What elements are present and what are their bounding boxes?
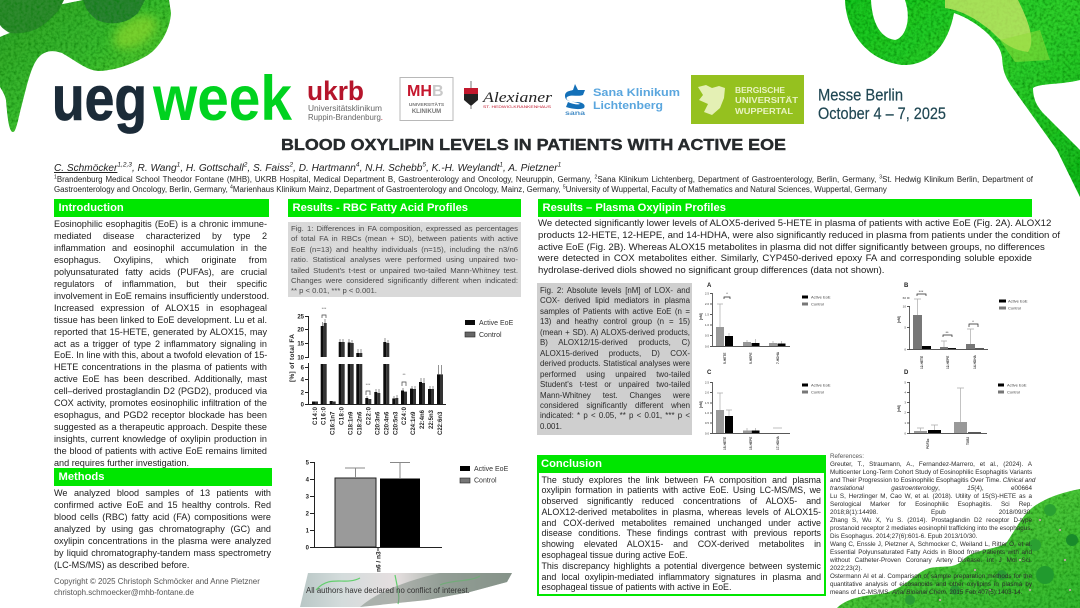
venue and date: October 4 – 7, 2025 — [818, 104, 946, 123]
text: Introduction: involvement in EoE remains insufficiently understood. — [54, 291, 269, 301]
chart D: COX products: 5 — [904, 380, 906, 384]
venue and date — [818, 86, 946, 123]
chart A: ALOX5 products: 5-HEPE — [749, 352, 753, 364]
logo: UKRB: ukrb — [307, 76, 364, 106]
chart: n6/n3 ratio: n6 / n3 — [376, 551, 382, 572]
chart D: COX products: PGF2α — [926, 439, 930, 449]
logo: MHB Universitätsklinikum: KLINIKUM — [412, 109, 441, 115]
chart C: ALOX15 products: 17-HDHA — [776, 435, 780, 450]
heading: Introduction: Introduction — [58, 202, 124, 214]
chart A: ALOX5 products: A — [707, 283, 712, 289]
text: Conclusion: esophageal tissue of patients with active in EoE. — [542, 582, 731, 592]
legend B: Control — [1008, 306, 1021, 310]
chart: n6/n3 ratio — [306, 460, 442, 572]
figure 2 caption: B) ALOX12/15-derived products, C) — [540, 338, 690, 347]
text: Conclusion: and COX-derived metabolites remained unchanged under active — [542, 518, 821, 528]
legend B — [999, 298, 1028, 310]
text: Conclusion: oxylipin formation in patients with active EoE. Using LC-MS/MS, we — [542, 485, 821, 495]
logo: MHB Universitätsklinikum: UNIVERSITÄTS — [409, 101, 445, 108]
venue and date: Messe Berlin — [818, 86, 903, 104]
figure 1 caption: Changes were considered significantly different when indicated: — [291, 276, 518, 285]
text: Results Plasma: were detected in COX metabolites either. Similarly, CYP450-derived epoxy FA and corresponding soluble epoxide — [538, 253, 1032, 264]
references: Serological Marker for Eosinophilic Esophagitis. Sci Rep. — [830, 501, 1032, 508]
figure 2 caption: COX- derived lipid mediators in plasma — [540, 296, 690, 305]
figure 1 caption: ratio. Statistical analyses were performed using unpaired two- — [291, 255, 518, 264]
text: Introduction: tissue has been linked to EoE development. Lu et al. — [54, 315, 267, 325]
heading: Results RBC: Results - RBC Fatty Acid Profiles — [292, 202, 468, 214]
figure 2 caption — [540, 286, 690, 431]
text: Conclusion: observed significantly reduced concentrations of ALOX5- and — [542, 496, 821, 506]
references: prostanoid receptor 2 mediates eosinophil trafficking into the esophagus. — [830, 525, 1032, 532]
references: 2018;8(1):14498. Epub 2018/09/30. — [830, 509, 1032, 516]
logo: Bergische Universität Wuppertal: UNIVERSITÄT — [735, 96, 798, 105]
text: Results Plasma: hydrolase-derived diols showed no significant group differences (data not shown). — [538, 265, 884, 276]
decoration: bottom-centre photo strip — [300, 573, 512, 607]
text: Methods — [54, 488, 271, 570]
heading: Results RBC — [288, 199, 521, 217]
chart: fatty acid composition: 22:4n6 — [420, 409, 426, 429]
chart A: ALOX5 products: [nM] — [699, 313, 703, 320]
figure 2 caption: 0.001. — [540, 422, 562, 431]
references: Lu S, Herzlinger M, Cao W, et al. (2018). Utility of 15(S)-HETE as a — [830, 493, 1032, 500]
legend A: Control — [811, 302, 824, 306]
figure 2 caption: Mann-Whitney test. Changes were — [540, 391, 690, 400]
text: Introduction: active EoE has been described. Additionally, mast — [54, 374, 267, 384]
text: Conclusion — [542, 474, 821, 592]
legend: fatty acid chart — [465, 320, 514, 339]
logo: UKRB: Universitätsklinikum — [308, 104, 382, 113]
references: 2022;23(2). — [830, 565, 862, 572]
chart: fatty acid composition: C22:6n3 — [438, 411, 444, 435]
text: Introduction: reported that 15-HETE, generated by ALOX15, may — [54, 327, 267, 337]
chart B: ALOX12/15 products: ** — [945, 330, 949, 335]
legend: fatty acid chart: Active EoE — [479, 320, 514, 327]
references: without Catheter-Proven Coronary Artery Disease. Int J Mol Sci. — [830, 557, 1032, 564]
chart C: ALOX15 products: 0.5 — [705, 421, 709, 425]
text: Methods: We analyzed blood samples of 13 patients with — [54, 488, 271, 498]
chart B: ALOX12/15 products: 10 — [903, 304, 906, 308]
chart: fatty acid composition: [%] of total FA — [289, 334, 296, 382]
figure 2 caption: performed using unpaired two-tailed — [540, 370, 690, 379]
logo: Sana Klinikum Lichtenberg — [565, 84, 680, 117]
logo: UKRB — [307, 76, 383, 122]
chart B: ALOX12/15 products: 0 — [904, 348, 906, 352]
logo: Sana Klinikum Lichtenberg: Lichtenberg — [593, 100, 663, 112]
references: translational gastroenterology, 15(4), e00664 — [830, 485, 1032, 492]
affiliations: 1Brandenburg Medical School Theodor Fontane (MHB), UKRB Hospital, Medical Department B, Gastroenterology and Oncology, Neuruppin, Germany, 2Sana Klinikum Lichtenberg, Department of Gastroenterology, Berlin, Germany, 3St. Hedwig Klinikum Berlin, Department of — [54, 174, 1033, 184]
figure 1 caption: ** p < 0.01, *** p < 0.001. — [291, 286, 377, 295]
chart: fatty acid composition: C20:3n6 — [375, 411, 381, 435]
references: Ostermann AI et al. Comparison of sample preparation methods for the — [830, 573, 1032, 580]
chart: n6/n3 ratio: 4 — [306, 478, 310, 484]
text: Results Plasma: active EoE (Fig. 2B). Whereas ALOX15 metabolites in plasma did not differ significantly between groups, no differences — [538, 242, 1045, 253]
text: Methods: analyzed by using gas chromatography (GC) and — [54, 524, 271, 534]
affiliations — [54, 174, 1033, 194]
text: Conclusion: and local oxylipin-mediated inflammatory signatures in plasma and — [542, 572, 821, 582]
chart A: ALOX5 products — [699, 283, 790, 364]
references: Zhang S, Wu X, Yu S. (2014). Prostaglandin D2 receptor D-type — [830, 517, 1032, 524]
chart: fatty acid composition: C16:0 — [322, 406, 328, 425]
chart B: ALOX12/15 products: * — [972, 319, 974, 324]
legend C: Active EoE — [811, 382, 831, 388]
figure 1 caption: EoE (n=13) and healthy individuals (n=15), including the n3/n6 — [291, 245, 518, 254]
heading: Methods — [54, 468, 272, 486]
text: Conclusion: ALOX12-derived metabolites in plasma, whereas levels of ALOX15- — [542, 507, 821, 517]
references — [830, 453, 1036, 596]
references: Wang C, Enssle J, Pietzner A, Schmocker C, Weiland L, Ritter O, et al. — [830, 541, 1032, 548]
chart: fatty acid composition: C16:1n7 — [331, 411, 337, 435]
references: Dis Esophagus. 2014;27(6):601-6. Epub 2013/10/30. — [830, 533, 977, 540]
legend D — [998, 382, 1027, 394]
references: Essential Polyunsaturated Fatty Acids in Blood from Patients with and — [830, 549, 1032, 556]
chart A: ALOX5 products: 0.0 — [705, 344, 709, 348]
chart D: COX products: 3 — [904, 400, 906, 404]
text: Introduction: the blood of patients with active EoE remains limited — [54, 446, 267, 456]
text: Introduction: insights, current knowledge of oxylipin production in — [54, 434, 267, 444]
text: Introduction: inflammation and eosinophil accumulation in the — [54, 243, 267, 253]
chart: fatty acid composition: C20:4n6 — [384, 411, 390, 435]
chart B: ALOX12/15 products: 12-HEPE — [946, 356, 950, 369]
chart: fatty acid composition: C18:0 — [340, 406, 346, 425]
chart: fatty acid composition: 0 — [301, 402, 305, 408]
text: Methods: blood cells (RBC) fatty acid (FA) compositions were — [54, 512, 271, 522]
chart: fatty acid composition — [289, 306, 446, 435]
decoration: bottom-right green blob — [837, 489, 1080, 608]
figure 2 caption: samples of Patients with active EoE (n = — [540, 307, 690, 316]
legend: n6/n3 chart — [460, 466, 509, 484]
chart: fatty acid composition: *** — [366, 382, 371, 387]
text: Conclusion: This discrepancy highlights a potential divergence between systemic — [542, 561, 821, 571]
copyright and contact — [54, 577, 260, 597]
figure 1 caption: Fig. 1: Differences in FA composition, expressed as percentages — [291, 224, 518, 233]
conclusion box — [538, 456, 825, 595]
text: Introduction: polyunsaturated fatty acids (PUFAs), are crucial — [54, 267, 267, 277]
chart D: COX products: D — [904, 370, 909, 376]
text: Introduction: EoE. In line with this, about a twofold elevation of 15- — [54, 350, 267, 360]
logo: Sana Klinikum Lichtenberg: sana — [565, 111, 586, 117]
chart B: ALOX12/15 products: B — [904, 283, 909, 289]
chart D: COX products: TXB2 — [966, 437, 970, 445]
heading: Methods: Methods — [58, 471, 104, 483]
references: Greuter, T., Straumann, A., Fernandez-Marrero, et al., (2024). A — [830, 461, 1032, 468]
logo: UEG Week: week — [152, 64, 293, 134]
legend C: Control — [811, 390, 824, 394]
chart C: ALOX15 products: C — [707, 370, 712, 376]
references: means of LC-MS/MS. Anal Bioanal Chem. 2015 Feb;407(5):1403-14. — [830, 589, 1023, 596]
legend D: Active EoE — [1007, 382, 1027, 388]
text: Methods: (LC-MS/MS) as described before. — [54, 560, 189, 570]
text: Introduction: COX activity, promotes eosinophilic infiltration of the — [54, 398, 267, 408]
chart: fatty acid composition: C24:0 — [402, 406, 408, 425]
chart C: ALOX15 products: [nM] — [699, 401, 703, 408]
chart A: ALOX5 products: 2.0 — [705, 302, 709, 306]
chart: n6/n3 ratio: 2 — [306, 512, 310, 518]
text: Introduction — [54, 219, 269, 468]
heading: Conclusion — [537, 455, 826, 473]
chart: fatty acid composition: *** — [322, 306, 327, 311]
chart B: ALOX12/15 products — [897, 283, 988, 369]
text: Results Plasma: We detected significantly lower levels of ALOX5-derived 5-HETE in plasma of patients with active EoE (Fig. 2A). ALOX12 — [538, 218, 1051, 229]
text: Results Plasma: products 12-HETE, 12-HEPE, and 14-HDHA, were also significantly reduced in plasma from patients under the condition of — [538, 230, 1060, 241]
logo: Alexianer: Alexianer — [482, 90, 552, 106]
text: Conclusion: showing elevated ALOX15- and COX-derived metabolites in — [542, 539, 821, 549]
text: Introduction: act as a trigger of type 2 inflammatory signaling in — [54, 339, 267, 349]
figure 2 caption: indicated: * p < 0.05, ** p < 0.01, *** p < — [540, 411, 690, 420]
logo: UKRB: Ruppin-Brandenburg. — [308, 113, 383, 122]
grey box: figure 1 caption — [288, 222, 521, 297]
figure 2 caption: (mean + SD). A) ALOX5-derived products, — [540, 328, 690, 337]
logo: Bergische Universität Wuppertal: WUPPERTAL — [735, 107, 793, 116]
chart D: COX products: [nM] — [897, 405, 901, 412]
logo: Bergische Universität Wuppertal — [691, 75, 804, 124]
copyright and contact: Copyright © 2025 Christoph Schmöcker and Anne Pietzner — [54, 577, 260, 586]
logo: MHB Universitätsklinikum: B — [432, 83, 444, 100]
text: Methods: confirmed active EoE and 15 healthy controls. Red — [54, 500, 271, 510]
logo: MHB Universitätsklinikum: MH — [407, 83, 432, 100]
logo: MHB Universitätsklinikum — [400, 78, 453, 120]
chart D: COX products — [897, 370, 987, 449]
figure 2 caption: Fig. 2: Absolute levels [nM] of LOX- and — [540, 286, 690, 295]
chart A: ALOX5 products: 1.0 — [705, 323, 709, 327]
text: Methods: by liquid chromatography-tandem mass spectrometry — [54, 548, 271, 558]
chart B: ALOX12/15 products: 12-HETE — [920, 356, 924, 369]
figure 2 caption: derived products. Statistical analyses were — [540, 359, 690, 368]
chart C: ALOX15 products: 15-HEPE — [749, 437, 753, 450]
legend A: Active EoE — [811, 294, 831, 300]
chart A: ALOX5 products: 7-HDHA — [776, 351, 780, 364]
text: Results Plasma — [538, 218, 1060, 276]
legend B: Active EoE — [1008, 298, 1028, 304]
text: Methods: oxylipin concentrations in the plasma were analyzed — [54, 536, 271, 546]
chart A: ALOX5 products: 2.5 — [705, 292, 709, 296]
text: Introduction: esophagus, and PGD2 receptor blockade has been — [54, 410, 267, 420]
legend C — [802, 382, 831, 394]
legend: n6/n3 chart: Control — [474, 478, 497, 484]
chart C: ALOX15 products: 2.5 — [705, 380, 709, 384]
chart B: ALOX12/15 products: 5 — [904, 326, 906, 330]
chart A: ALOX5 products: 0.5 — [705, 334, 709, 338]
legend: n6/n3 chart: Active EoE — [474, 466, 509, 473]
text: Introduction: and requires further investigation. — [54, 458, 189, 468]
references: References: — [830, 453, 864, 460]
chart A: ALOX5 products: 5-HETE — [723, 353, 727, 364]
chart C: ALOX15 products — [699, 370, 790, 450]
chart: fatty acid composition: 6 — [301, 366, 305, 372]
chart: fatty acid composition: 25 — [297, 314, 305, 320]
legend D: Control — [1007, 390, 1020, 394]
chart D: COX products: 4 — [904, 390, 906, 394]
chart: fatty acid composition: C24:1n9 — [411, 411, 417, 435]
text: Conclusion: disease conditions. These findings contrast with previous reports — [542, 528, 821, 538]
title: BLOOD OXYLIPIN LEVELS IN PATIENTS WITH ACTIVE EOE — [281, 137, 786, 154]
heading: Conclusion: Conclusion — [541, 458, 602, 470]
logo: UEG Week: ueg — [52, 64, 147, 134]
figure 1 caption: of total FA in RBCs (mean + SD), between patients with active — [291, 234, 518, 243]
conflict of interest note: All authors have declared no conflict of interest. — [306, 586, 470, 595]
text: Introduction: esophagus. Oxylipins, which originate from — [54, 255, 267, 265]
decoration: top-right green tentacle — [845, 0, 1080, 197]
legend: fatty acid chart: Control — [479, 332, 502, 339]
chart D: COX products: 0 — [904, 432, 906, 436]
chart: fatty acid composition: C18:1n9 — [349, 411, 355, 435]
chart C: ALOX15 products: 15-HETE — [723, 437, 727, 450]
heading: Results Plasma: Results – Plasma Oxylipin Profiles — [542, 202, 726, 214]
chart: fatty acid composition: 2 — [301, 390, 305, 396]
copyright and contact: christoph.schmoecker@mhb-fontane.de — [54, 588, 194, 597]
text: Conclusion: The study explores the link between FA composition and plasma — [542, 474, 821, 484]
heading: Introduction — [54, 199, 269, 217]
chart: n6/n3 ratio: 3 — [306, 494, 310, 500]
chart: fatty acid composition: C22:0 — [366, 406, 372, 425]
chart: fatty acid composition: 15 — [297, 342, 305, 348]
authors: C. Schmöcker1,2,3, R. Wang1, H. Gottschall2, S. Faiss2, D. Hartmann4, N.H. Schebb5, K.-H. Weylandt1, A. Pietzner1 — [54, 162, 561, 174]
chart: fatty acid composition: 4 — [301, 378, 305, 384]
grey box: figure 2 caption — [537, 283, 692, 435]
logo: Sana Klinikum Lichtenberg: Sana Klinikum — [593, 87, 680, 99]
text: Introduction: Eosinophilic esophagitis (EoE) is a chronic immune- — [54, 219, 267, 229]
chart B: ALOX12/15 products: 14-HDHA — [973, 354, 977, 369]
chart: fatty acid composition: C18:2n6 — [357, 411, 363, 435]
chart A: ALOX5 products: 1.5 — [705, 312, 709, 316]
legend A — [802, 294, 831, 306]
chart: fatty acid composition: 10 — [297, 356, 305, 362]
references: and Their Progression to Eosinophilic Esophagitis Over Time. Clinical and — [830, 477, 1035, 484]
figure 2 caption: Student's t-test or unpaired two-tailed — [540, 380, 690, 389]
figure 1 caption: tailed Student's t-test or unpaired two-tailed Mann-Whitney test. — [291, 266, 518, 275]
chart C: ALOX15 products: 1.5 — [705, 401, 709, 405]
text: Introduction: cell–derived prostaglandin D2 (PGD2), produced via — [54, 386, 267, 396]
chart: fatty acid composition: 20 — [297, 328, 305, 334]
references: Multicenter Long-Term Cohort Study of Eosinophilic Esophagitis Variants — [830, 469, 1032, 476]
chart: fatty acid composition: ** — [402, 372, 406, 377]
chart B: ALOX12/15 products: *** — [919, 289, 924, 294]
references: quantitative analysis of eicosanoids and other oxylipins in plasma by — [830, 581, 1032, 588]
chart: fatty acid composition: C14:0 — [313, 406, 319, 425]
text: Introduction: regulators of inflammation, but their specific — [54, 279, 267, 289]
figure 2 caption: ALOX15-derived products, D) COX- — [540, 349, 690, 358]
figure 1 caption — [291, 224, 518, 295]
text: Introduction: HETE concentrations in the plasma of patients with — [54, 362, 267, 372]
chart: n6/n3 ratio: 5 — [306, 460, 310, 466]
chart B: ALOX12/15 products: 60 — [903, 296, 906, 300]
text: Introduction: mediated disease characterized by type 2 — [54, 231, 267, 241]
text: Conclusion: esophageal tissue during active EoE. — [542, 550, 688, 560]
chart B: ALOX12/15 products: [nM] — [897, 316, 901, 323]
logo: Alexianer: ST. HEDWIG-KRANKENHAUS — [483, 104, 551, 109]
logo: Alexianer — [464, 81, 552, 109]
chart D: COX products: 2 — [904, 410, 906, 414]
logo: UEG Week — [52, 64, 293, 134]
chart C: ALOX15 products: 0.0 — [705, 432, 709, 436]
heading: Results Plasma — [538, 199, 1032, 217]
figure 2 caption: 13) and heathy control group (n = 15) — [540, 317, 690, 326]
figure 2 caption: considered significantly different when — [540, 401, 690, 410]
chart D: COX products: 1 — [904, 421, 906, 425]
decoration: top-left green blob — [0, 0, 171, 132]
chart: n6/n3 ratio: 1 — [306, 528, 310, 534]
chart A: ALOX5 products: * — [726, 291, 728, 296]
text: Introduction: suggested as a therapeutic approach. Despite these — [54, 422, 267, 432]
affiliations: Gastroenterology and Oncology, Berlin, Germany, 4Marienhaus Klinikum Mainz, Department of Gastroenterology and Oncology, Mainz, Germany, 5University of Wuppertal, Faculty of Mathematics and Natural Sciences, Wuppertal, Germany — [54, 184, 887, 194]
chart C: ALOX15 products: 1.0 — [705, 411, 709, 415]
chart: n6/n3 ratio: 0 — [306, 546, 310, 552]
text: Introduction: Increased expression of ALOX15 in esophageal — [54, 303, 267, 313]
chart: fatty acid composition: 22:5n3 — [429, 409, 435, 429]
chart C: ALOX15 products: 2.0 — [705, 390, 709, 394]
logo: Bergische Universität Wuppertal: BERGISCHE — [735, 86, 786, 95]
chart: fatty acid composition: C20:5n3 — [393, 411, 399, 435]
